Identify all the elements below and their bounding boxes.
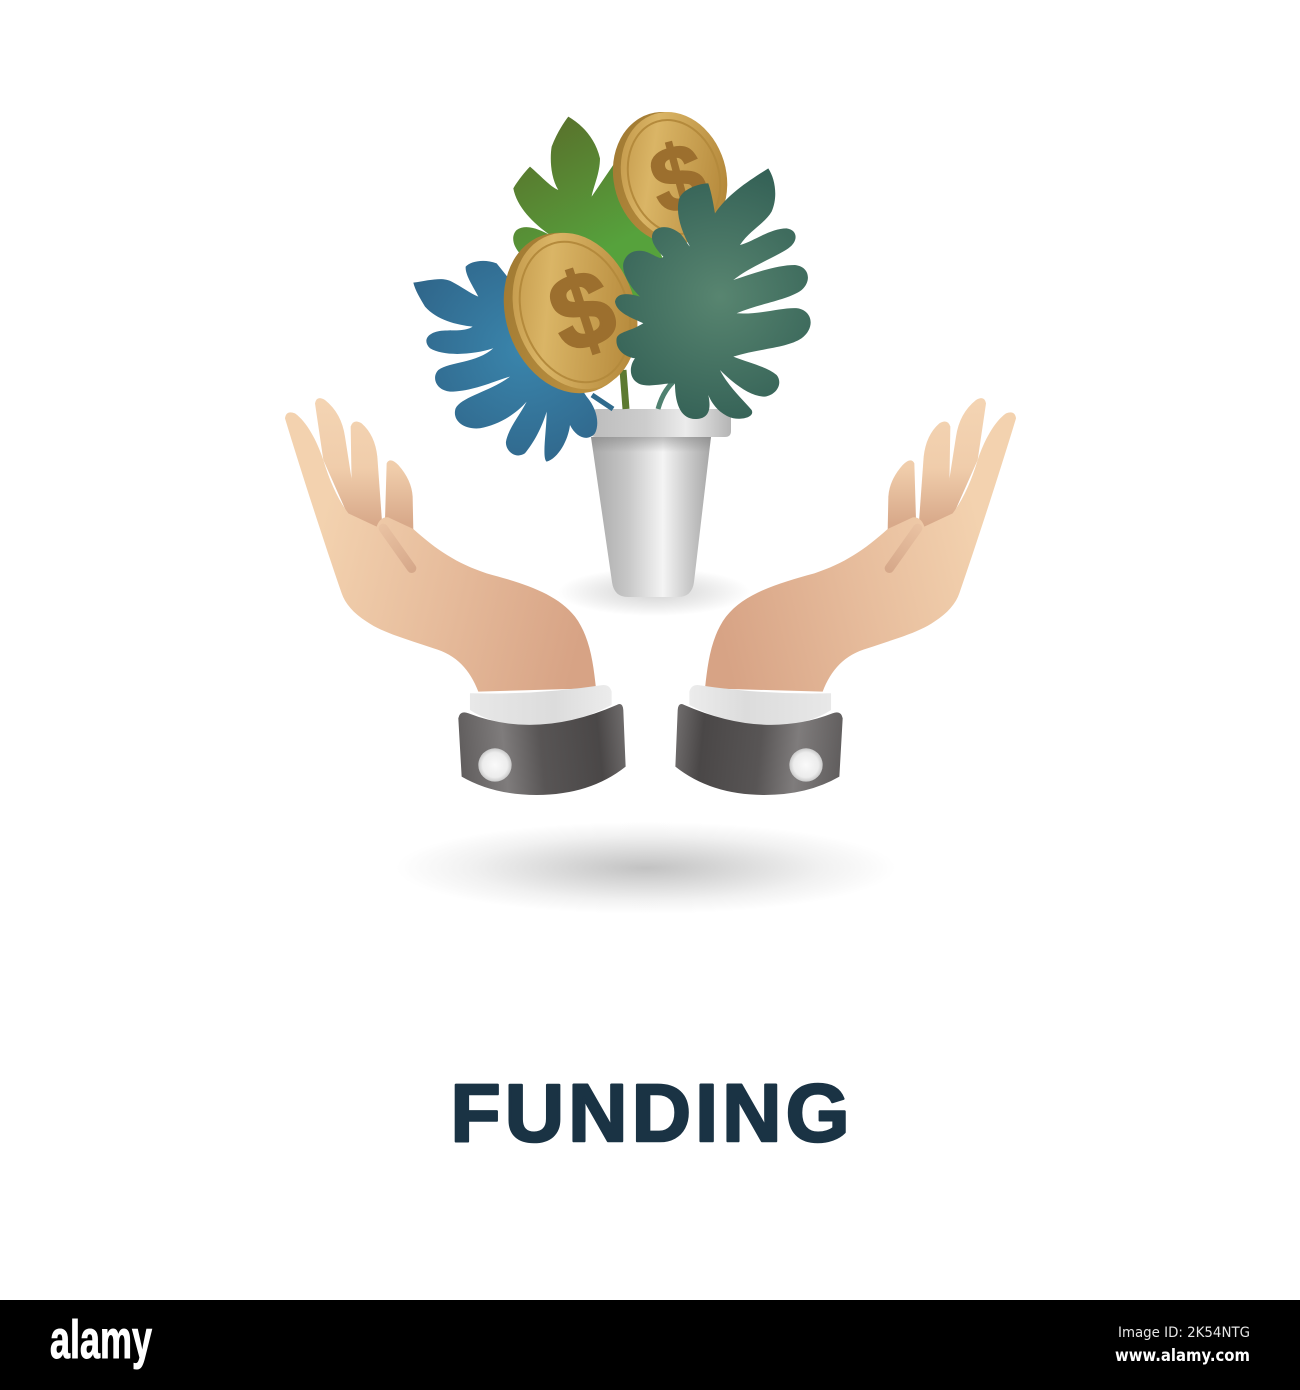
palm [285, 412, 596, 692]
stems [592, 370, 680, 409]
cuff button [478, 748, 512, 782]
large coin [483, 215, 658, 411]
left hand [285, 398, 626, 795]
alamy logo: alamy [50, 1310, 152, 1370]
thumb [383, 528, 412, 568]
dollar sign: $ [536, 246, 629, 376]
pot [590, 409, 731, 597]
dollar sign: $ [640, 123, 716, 235]
small coin [597, 98, 743, 258]
website: www.alamy.com [1115, 1346, 1250, 1366]
image id: Image ID: 2K54NTG [1118, 1325, 1250, 1341]
title: FUNDING [450, 1068, 850, 1159]
suit cuff [458, 704, 626, 795]
shirt sleeve [470, 685, 612, 727]
back fingers [315, 398, 413, 540]
footer bar [0, 1300, 1300, 1390]
ground shadow [396, 822, 896, 914]
blue leaf [413, 261, 597, 462]
olive leaf [513, 117, 667, 307]
dark green leaf [615, 168, 811, 419]
plant with coins [413, 98, 811, 616]
right hand [675, 398, 1016, 795]
pot shadow [558, 568, 750, 616]
